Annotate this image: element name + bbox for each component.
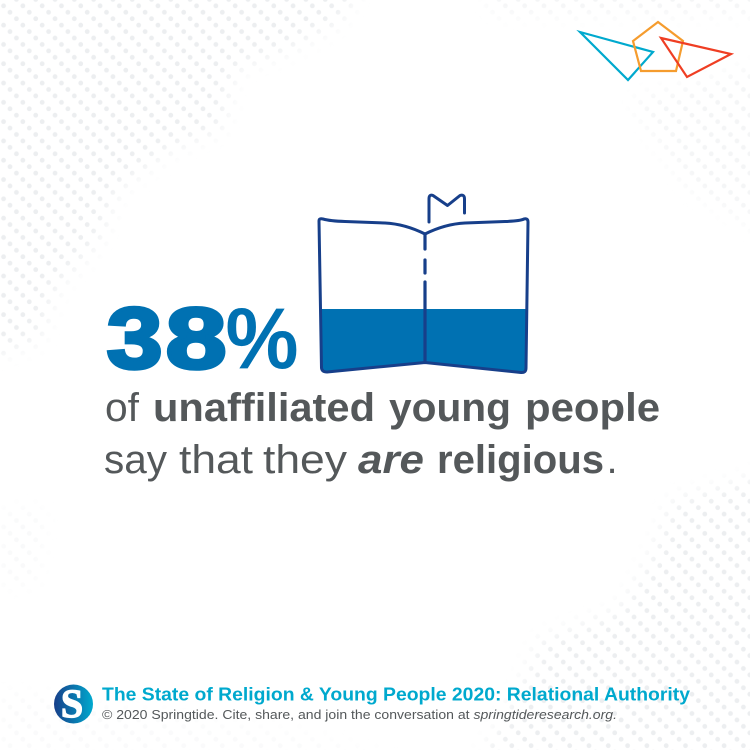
logo: Springtide S badge: S: [61, 681, 83, 726]
book outline: [319, 219, 528, 373]
text: second line of statement: they: [263, 438, 347, 482]
text: second line of statement: .: [606, 438, 618, 482]
icon: open book filled to 38 percent: [319, 195, 528, 373]
text: second line of statement: that: [179, 438, 253, 482]
bookmark: [429, 195, 464, 222]
text: first line of statement: unaffiliated: [153, 386, 375, 430]
decorative geometric shapes: [580, 22, 731, 80]
statistic: 38%: 8: [166, 291, 227, 387]
text: first line of statement: [105, 386, 660, 430]
text: second line of statement: religious: [437, 438, 604, 482]
shape: orange pentagon: [633, 22, 683, 71]
statistic: 38%: [107, 291, 298, 388]
shape: red triangle: [661, 38, 731, 77]
text: first line of statement: of: [105, 386, 140, 430]
statistic: 38%: %: [226, 292, 298, 388]
book spine: [423, 234, 427, 362]
statistic: 38%: 3: [107, 291, 163, 387]
text: second line of statement: are: [358, 438, 424, 482]
book fill level: [320, 309, 527, 372]
text: first line of statement: young: [389, 386, 511, 430]
shape: blue triangle: [580, 32, 653, 80]
text: second line of statement: [104, 438, 618, 482]
footer: report title: The State of Religion & Young People 2020: Relational Authority: [102, 684, 691, 704]
footer: copyright line: © 2020 Springtide. Cite, share, and join the conversation at springtideresearch.org.: [102, 707, 617, 722]
text: first line of statement: people: [525, 386, 660, 430]
logo: Springtide S badge: [54, 681, 93, 726]
text: second line of statement: say: [104, 438, 167, 482]
book page background: [319, 220, 527, 371]
